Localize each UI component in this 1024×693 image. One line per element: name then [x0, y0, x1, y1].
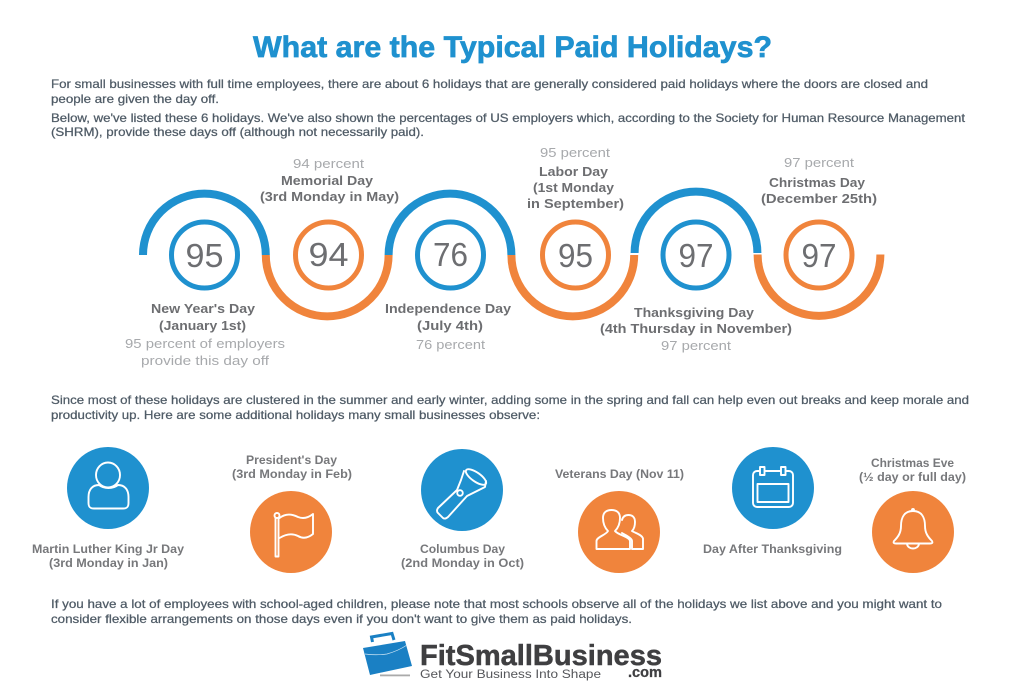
middle paragraph: productivity up. Here are some additional holidays many small businesses observe:: [51, 408, 540, 422]
Memorial Day: 94 percent: [293, 156, 364, 171]
Thanksgiving Day: 97 percent: [661, 338, 731, 353]
Labor Day: 95 percent: [540, 145, 610, 160]
New Year's Day: [125, 222, 286, 368]
additional holiday: Martin Luther King Jr Day: (3rd Monday in Jan): [49, 558, 168, 570]
additional holiday: Martin Luther King Jr Day: [32, 447, 185, 570]
Thanksgiving Day: 97: [678, 237, 714, 274]
New Year's Day: New Year's Day: [151, 302, 255, 316]
Christmas Day: [761, 155, 877, 288]
Thanksgiving Day: [600, 222, 792, 353]
additional holiday: Veterans Day: Veterans Day (Nov 11): [555, 469, 684, 481]
middle paragraph: Since most of these holidays are clustered in the summer and early winter, adding some in the spring and fall can help even out breaks and keep morale and: [51, 393, 969, 407]
additional holiday: President's Day: (3rd Monday in Feb): [232, 469, 352, 481]
icon: briefcase: [363, 634, 412, 676]
logo: Fit Small Business: Get Your Business Into Shape: [420, 669, 601, 681]
Independence Day: 76 percent: [416, 337, 485, 352]
New Year's Day: (January 1st): [159, 319, 246, 333]
additional holiday: Christmas Eve: [859, 458, 966, 573]
logo: Fit Small Business: [363, 634, 662, 681]
middle paragraph: [51, 393, 969, 422]
closing paragraph: If you have a lot of employees with school-aged children, please note that most schools observe all of the holidays we list above and you might want to: [51, 597, 942, 611]
intro text: [51, 77, 966, 139]
additional holiday: Martin Luther King Jr Day: Martin Luther King Jr Day: [32, 544, 185, 556]
Memorial Day: (3rd Monday in May): [260, 190, 399, 204]
intro text: Below, we've listed these 6 holidays. We've also shown the percentages of US employers which, according to the Society for Human Resource Management: [51, 111, 966, 125]
Thanksgiving Day: (4th Thursday in November): [600, 322, 792, 336]
Labor Day: [527, 145, 624, 288]
intro text: For small businesses with full time employees, there are about 6 holidays that are generally considered paid holidays where the doors are closed and: [51, 77, 928, 91]
icon: two people: [596, 510, 643, 549]
icon: bell: [894, 509, 932, 548]
Christmas Day: (December 25th): [761, 192, 877, 206]
Independence Day: (July 4th): [417, 319, 483, 333]
title: What are the Typical Paid Holidays?: [253, 31, 772, 64]
Thanksgiving Day: Thanksgiving Day: [634, 306, 754, 320]
logo: Fit Small Business: .com: [628, 664, 662, 681]
Labor Day: (1st Monday: [533, 181, 614, 195]
additional holiday: Christmas Eve: Christmas Eve: [871, 458, 954, 470]
intro text: people are given the day off.: [51, 92, 219, 106]
additional holiday: Day After Thanksgiving: [703, 447, 842, 556]
Labor Day: in September): [527, 197, 624, 211]
Memorial Day: 94: [308, 236, 348, 273]
Memorial Day: [260, 156, 399, 288]
icon: person: [88, 462, 128, 508]
additional holiday: Christmas Eve: (½ day or full day): [859, 472, 966, 484]
closing paragraph: consider flexible arrangements on those days even if you don't want to give them as paid holidays.: [51, 612, 632, 626]
closing paragraph: [51, 597, 942, 626]
Labor Day: 95: [558, 237, 593, 274]
Labor Day: Labor Day: [539, 165, 608, 179]
Christmas Day: 97: [802, 237, 836, 274]
New Year's Day: 95: [186, 237, 224, 274]
wave chart: six paid holidays: [125, 145, 880, 368]
Memorial Day: Memorial Day: [281, 174, 373, 188]
additional holiday: President's Day: President's Day: [246, 455, 338, 467]
intro text: (SHRM), provide these days off (although not necessarily paid).: [51, 125, 424, 139]
additional holiday: Columbus Day: Columbus Day: [420, 544, 506, 556]
additional holiday: Columbus Day: (2nd Monday in Oct): [401, 558, 524, 570]
Independence Day: 76: [433, 236, 468, 273]
additional holiday: Veterans Day: [555, 469, 684, 573]
icon: calendar: [753, 467, 793, 507]
logo: Fit Small Business: FitSmallBusiness: [420, 640, 662, 672]
icon: flashlight: [437, 466, 488, 519]
icon: flag: [274, 513, 313, 556]
New Year's Day: 95 percent of employers: [125, 336, 286, 351]
additional holiday: President's Day: [232, 455, 352, 573]
additional holiday: Day After Thanksgiving: Day After Thanksgiving: [703, 544, 842, 556]
wave arcs: [143, 192, 880, 316]
Independence Day: [385, 222, 511, 352]
Christmas Day: 97 percent: [784, 155, 854, 170]
Independence Day: Independence Day: [385, 302, 511, 316]
additional holiday: Columbus Day: [401, 449, 524, 570]
New Year's Day: provide this day off: [141, 353, 269, 368]
Christmas Day: Christmas Day: [769, 176, 865, 190]
